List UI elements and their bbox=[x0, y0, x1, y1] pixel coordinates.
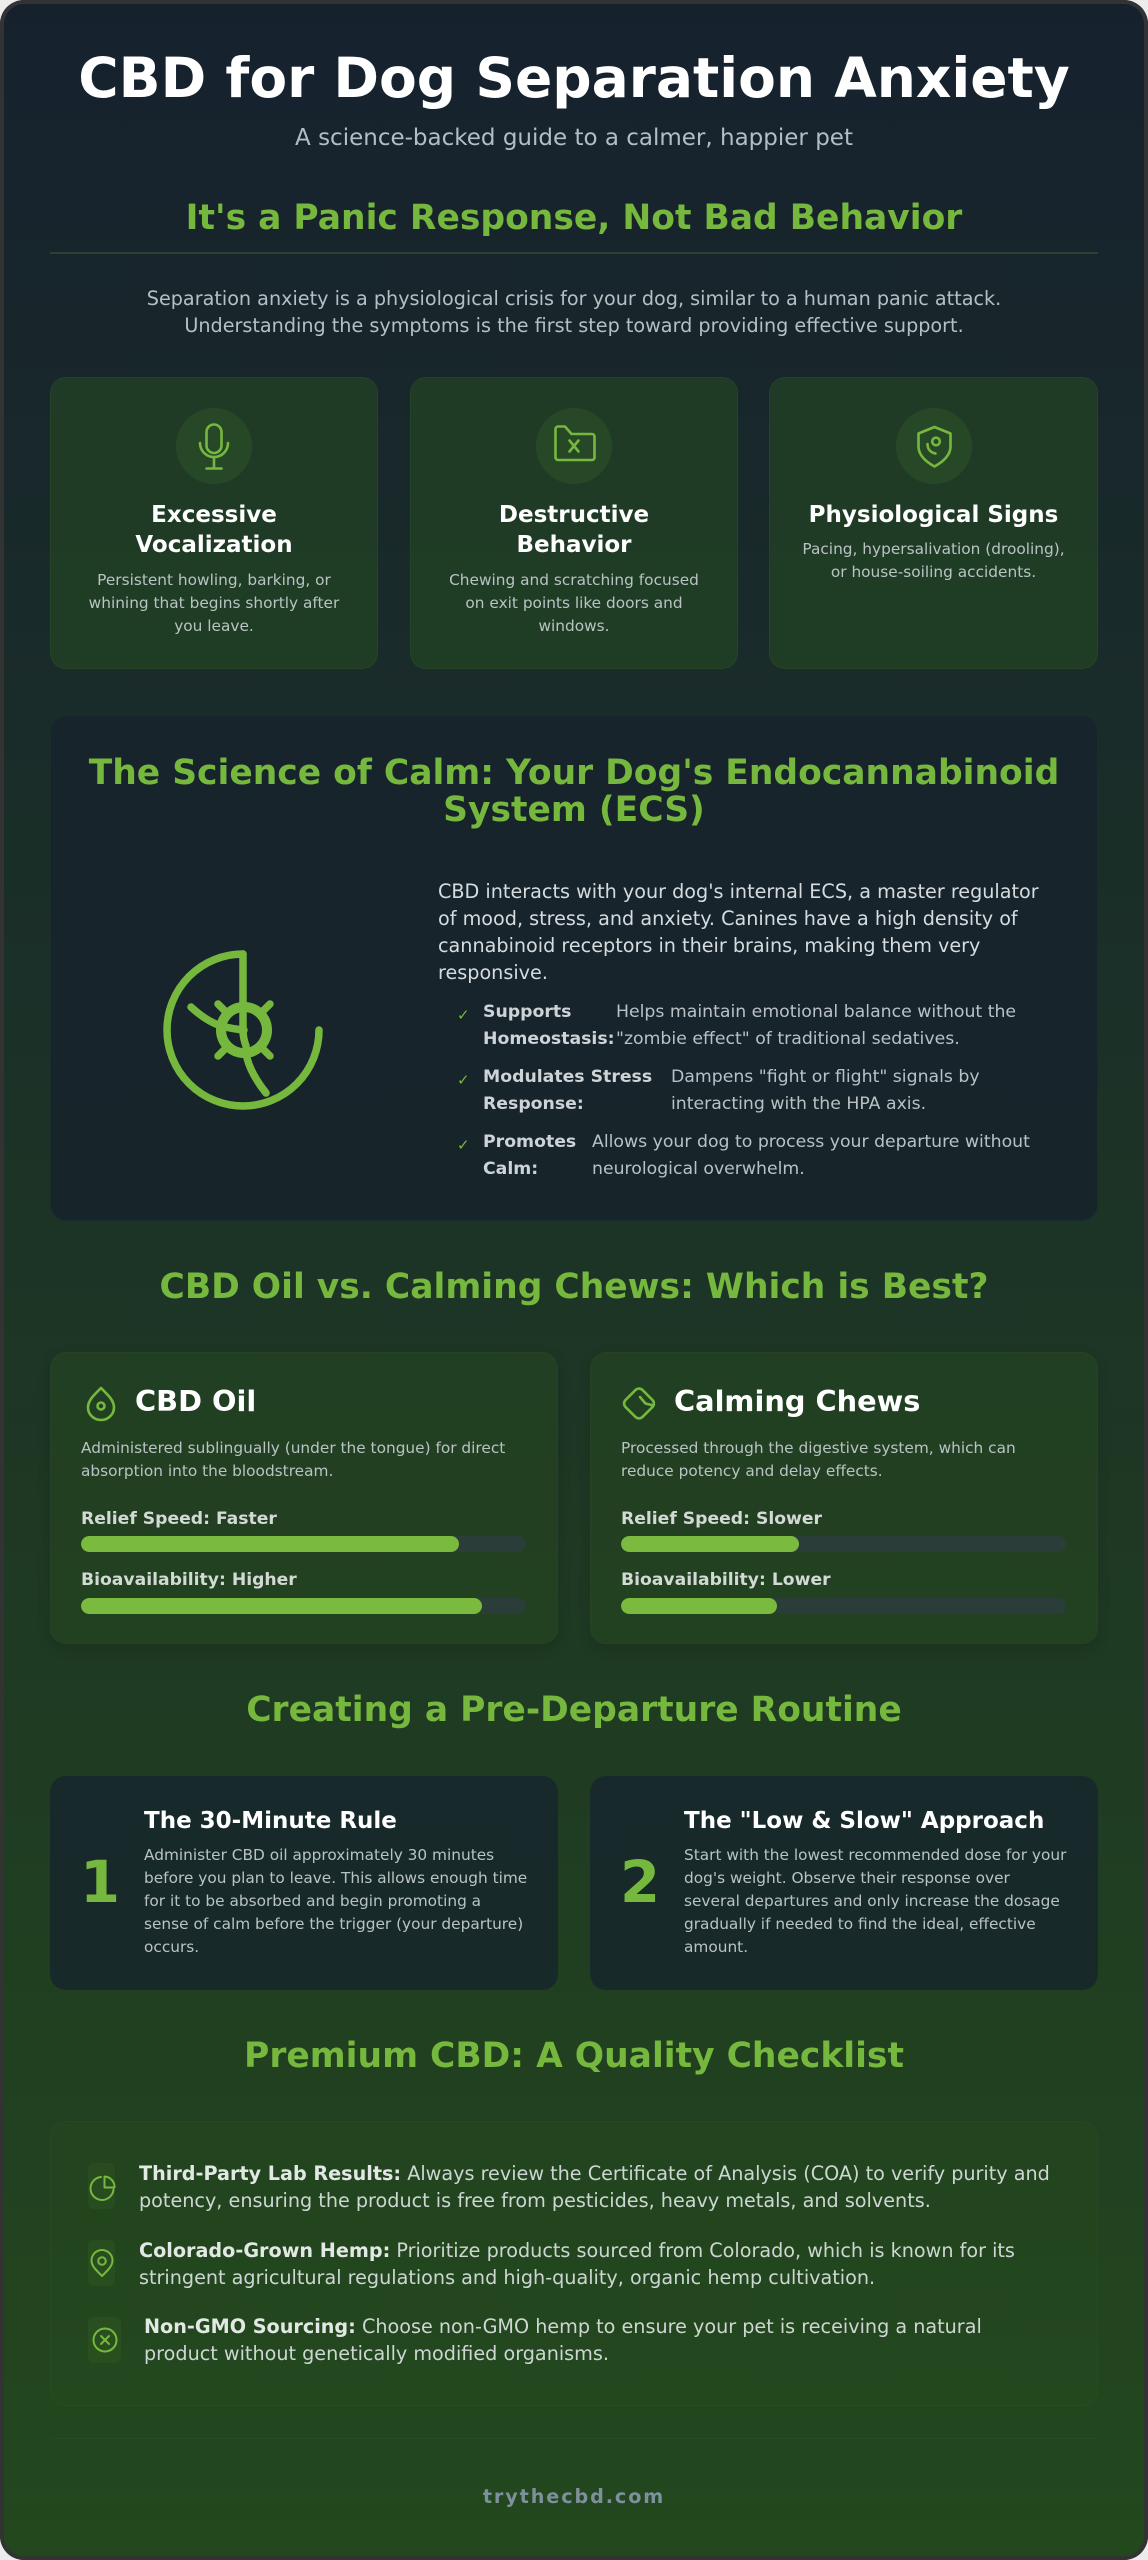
option name: Calming Chews bbox=[674, 1384, 920, 1418]
card text: Persistent howling, barking, or bbox=[97, 571, 331, 589]
list item: stress response bbox=[457, 1067, 980, 1114]
panel: quality checklist bbox=[50, 2121, 1098, 2406]
card text bbox=[89, 571, 340, 635]
body text: responsive. bbox=[438, 961, 548, 984]
checklist item: colorado hemp bbox=[139, 2239, 1015, 2289]
label: relief speed: Relief Speed: Faster bbox=[81, 1509, 277, 1529]
list item: homeostasis bbox=[457, 1002, 1016, 1049]
step text: before you plan to leave. This allows enough time bbox=[144, 1869, 527, 1887]
list item: stress response: ✓ bbox=[457, 1071, 470, 1089]
panel: step 1 bbox=[50, 1776, 558, 1990]
list item: promotes calm: Calm: bbox=[483, 1159, 538, 1179]
list item: promotes calm bbox=[457, 1132, 1030, 1179]
option name: CBD Oil bbox=[135, 1384, 256, 1418]
card text bbox=[802, 540, 1065, 581]
bar: relief speed 85% bbox=[81, 1536, 526, 1552]
checklist item: lab results bbox=[139, 2162, 1050, 2212]
step text: occurs. bbox=[144, 1938, 199, 1956]
heading: science of calm bbox=[88, 753, 1059, 830]
footer: trythecbd.com bbox=[483, 2485, 665, 2508]
heading: comparison: CBD Oil vs. Calming Chews: Which is Best? bbox=[160, 1267, 988, 1307]
card heading: Physiological Signs bbox=[809, 502, 1058, 528]
list item: promotes calm: neurological overwhelm. bbox=[592, 1159, 805, 1179]
checklist item: non-GMO: product without genetically modified organisms. bbox=[144, 2342, 609, 2365]
option description: reduce potency and delay effects. bbox=[621, 1462, 883, 1480]
option description: absorption into the bloodstream. bbox=[81, 1462, 333, 1480]
list item: homeostasis: Homeostasis: bbox=[483, 1029, 615, 1049]
step number: 2 bbox=[620, 1848, 660, 1916]
panel: science of calm bbox=[50, 715, 1098, 1221]
icon: shield bbox=[896, 408, 972, 484]
step text: gradually if needed to find the ideal, effective bbox=[684, 1915, 1036, 1933]
heading: science of calm: The Science of Calm: Your Dog's Endocannabinoid bbox=[89, 753, 1059, 793]
card heading bbox=[499, 502, 649, 558]
step text: Administer CBD oil approximately 30 minutes bbox=[144, 1846, 494, 1864]
checklist item: lab results: potency, ensuring the product is free from pesticides, heavy metals, and solvents. bbox=[139, 2189, 931, 2212]
card heading: Behavior bbox=[516, 532, 632, 558]
card heading: Vocalization bbox=[135, 532, 293, 558]
checklist item: non-GMO: Non-GMO Sourcing: Choose non-GMO hemp to ensure your pet is receiving a natural bbox=[144, 2315, 982, 2338]
step number: 1 bbox=[80, 1848, 120, 1916]
card heading: Excessive bbox=[151, 502, 277, 528]
checklist item: colorado hemp: stringent agricultural regulations and high-quality, organic hemp cultivation. bbox=[139, 2266, 875, 2289]
list item: stress response: Modulates Stress bbox=[483, 1067, 652, 1087]
bar: relief speed 40% bbox=[621, 1536, 1066, 1552]
card text: windows. bbox=[538, 617, 610, 635]
icon: lab results pie bbox=[88, 2163, 115, 2209]
bar: bioavailability 35% bbox=[621, 1598, 1066, 1614]
body text: CBD interacts with your dog's internal ECS, a master regulator bbox=[438, 880, 1039, 903]
label: bioavailability: Bioavailability: Higher bbox=[81, 1570, 297, 1590]
card text: or house-soiling accidents. bbox=[831, 563, 1036, 581]
icon: folder with x bbox=[536, 408, 612, 484]
checklist item: lab results: Third-Party Lab Results: Always review the Certificate of Analysis (COA) to verify purity and bbox=[139, 2162, 1050, 2185]
body text bbox=[438, 880, 1039, 984]
list item: stress response: Dampens "fight or flight" signals by bbox=[671, 1067, 980, 1087]
icon: endocannabinoid system bbox=[163, 950, 323, 1110]
list item: stress response: Response: bbox=[483, 1094, 584, 1114]
step text: sense of calm before the trigger (your departure) bbox=[144, 1915, 523, 1933]
panel: CBD oil bbox=[50, 1352, 558, 1644]
list item: homeostasis: "zombie effect" of traditional sedatives. bbox=[616, 1029, 960, 1049]
label: relief speed: Relief Speed: Slower bbox=[621, 1509, 822, 1529]
step text: Start with the lowest recommended dose for your bbox=[684, 1846, 1066, 1864]
card text: whining that begins shortly after bbox=[89, 594, 339, 612]
card heading: Destructive bbox=[499, 502, 649, 528]
card text: on exit points like doors and bbox=[465, 594, 683, 612]
option description bbox=[81, 1439, 505, 1480]
body text: of mood, stress, and anxiety. Canines have a high density of bbox=[438, 907, 1018, 930]
title: CBD for Dog Separation Anxiety bbox=[78, 46, 1070, 110]
panel: physiological signs bbox=[769, 377, 1098, 669]
list item: homeostasis: Supports bbox=[483, 1002, 571, 1022]
icon: non-GMO circle x bbox=[88, 2317, 121, 2363]
list item: promotes calm: Allows your dog to process your departure without bbox=[592, 1132, 1030, 1152]
panel: step 2 bbox=[590, 1776, 1098, 1990]
card text: Chewing and scratching focused bbox=[449, 571, 699, 589]
icon: location pin bbox=[88, 2240, 115, 2286]
step text bbox=[684, 1846, 1066, 1956]
bar: bioavailability 90% bbox=[81, 1598, 526, 1614]
list item: homeostasis: ✓ bbox=[457, 1006, 470, 1024]
option description: Processed through the digestive system, which can bbox=[621, 1439, 1016, 1457]
label: bioavailability: Bioavailability: Lower bbox=[621, 1570, 831, 1590]
panel: destructive behavior bbox=[410, 377, 738, 669]
option description bbox=[621, 1439, 1016, 1480]
intro text: Separation anxiety is a physiological crisis for your dog, similar to a human panic attack. bbox=[147, 287, 1001, 310]
card text: Pacing, hypersalivation (drooling), bbox=[802, 540, 1065, 558]
heading: checklist: Premium CBD: A Quality Checklist bbox=[244, 2036, 904, 2076]
step text: amount. bbox=[684, 1938, 748, 1956]
panel: calming chews bbox=[590, 1352, 1098, 1644]
option description: Administered sublingually (under the tongue) for direct bbox=[81, 1439, 505, 1457]
checklist item: non-GMO bbox=[144, 2315, 982, 2365]
list item: promotes calm: ✓ bbox=[457, 1136, 470, 1154]
checklist item: colorado hemp: Colorado-Grown Hemp: Prioritize products sourced from Colorado, which is known for its bbox=[139, 2239, 1015, 2262]
card heading bbox=[135, 502, 293, 558]
icon: chew bbox=[622, 1387, 656, 1420]
list item: homeostasis: Helps maintain emotional balance without the bbox=[616, 1002, 1016, 1022]
card text bbox=[449, 571, 699, 635]
step text: several departures and only increase the dosage bbox=[684, 1892, 1060, 1910]
step text bbox=[144, 1846, 527, 1956]
list item: stress response: interacting with the HPA axis. bbox=[671, 1094, 926, 1114]
heading: panic response: It's a Panic Response, Not Bad Behavior bbox=[186, 198, 962, 238]
heading: routine: Creating a Pre-Departure Routine bbox=[246, 1690, 902, 1730]
step heading: The 30-Minute Rule bbox=[144, 1808, 397, 1834]
list item: promotes calm: Promotes bbox=[483, 1132, 576, 1152]
icon: droplet bbox=[86, 1386, 116, 1422]
intro text: Understanding the symptoms is the first step toward providing effective support. bbox=[184, 314, 964, 337]
step heading: The "Low & Slow" Approach bbox=[684, 1808, 1044, 1834]
body text: cannabinoid receptors in their brains, making them very bbox=[438, 934, 980, 957]
heading: science of calm: System (ECS) bbox=[443, 790, 705, 830]
step text: for it to be absorbed and begin promoting a bbox=[144, 1892, 481, 1910]
card text: you leave. bbox=[174, 617, 254, 635]
step text: dog's weight. Observe their response over bbox=[684, 1869, 1010, 1887]
icon: microphone bbox=[176, 408, 252, 484]
subtitle: A science-backed guide to a calmer, happier pet bbox=[295, 125, 853, 151]
panel: excessive vocalization bbox=[50, 377, 378, 669]
intro text bbox=[147, 287, 1001, 337]
